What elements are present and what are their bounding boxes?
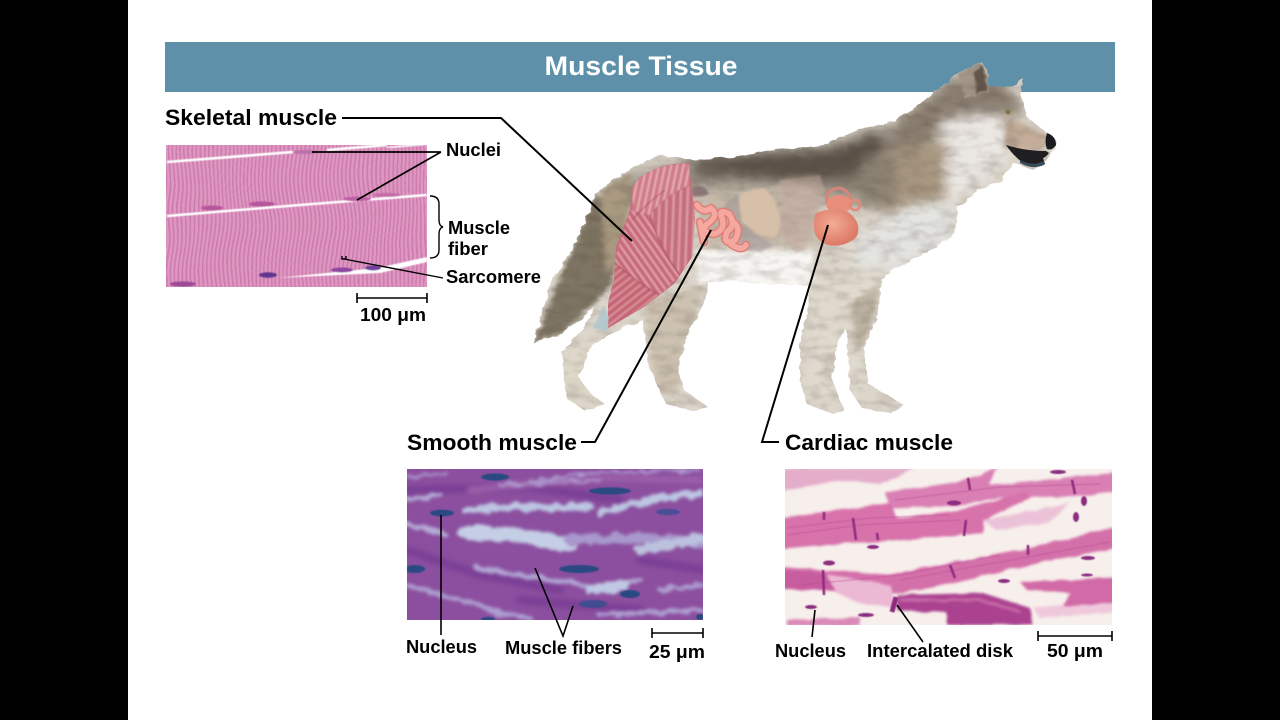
scale bar: 100 micrometres bbox=[357, 293, 427, 303]
label: muscle fibers: Muscle fibers bbox=[505, 638, 622, 658]
micrograph: smooth muscle bbox=[405, 469, 704, 621]
internal organs faint bbox=[692, 175, 825, 252]
heart bbox=[814, 188, 860, 246]
micrograph: skeletal muscle bbox=[166, 145, 427, 287]
tendon bbox=[593, 305, 609, 331]
wolf body with fur bbox=[525, 55, 1065, 420]
intestines bbox=[697, 205, 746, 248]
label: fiber: fiber bbox=[448, 239, 488, 259]
scale bar: 50 micrometres bbox=[1038, 631, 1112, 641]
micrograph: cardiac muscle bbox=[780, 467, 1115, 626]
callout line: cardiac muscle bbox=[762, 225, 828, 442]
smooth muscle labels and pointers bbox=[406, 515, 705, 662]
callout line: smooth muscle bbox=[581, 230, 711, 442]
heading: smooth muscle: Smooth muscle bbox=[407, 430, 577, 455]
heading: skeletal muscle: Skeletal muscle bbox=[165, 105, 337, 130]
wolf illustration bbox=[525, 55, 1065, 420]
scale label: 100 micrometres: 100 μm bbox=[360, 305, 426, 325]
scale label: 50 micrometres: 50 μm bbox=[1047, 641, 1103, 661]
label: nucleus: Nucleus bbox=[775, 641, 846, 661]
callout line: skeletal muscle bbox=[342, 118, 632, 241]
heading: cardiac muscle: Cardiac muscle bbox=[785, 430, 953, 455]
label: muscle fiber: Muscle bbox=[448, 218, 510, 238]
wolf mouth and nose bbox=[1006, 110, 1056, 167]
sarcomere pointer bbox=[342, 256, 443, 278]
label: intercalated disk: Intercalated disk bbox=[867, 641, 1014, 661]
scale label: 25 micrometres: 25 μm bbox=[649, 642, 705, 662]
title: Muscle Tissue bbox=[544, 51, 738, 81]
cardiac muscle labels and pointers bbox=[775, 605, 1112, 661]
brace: muscle fiber bbox=[430, 196, 443, 258]
title banner bbox=[165, 42, 1115, 92]
pointers: muscle fibers bbox=[535, 568, 573, 636]
label: nuclei: Nuclei bbox=[446, 140, 501, 160]
white slide bbox=[128, 0, 1152, 720]
label: nucleus: Nucleus bbox=[406, 637, 477, 657]
skeletal labels and pointers bbox=[312, 140, 541, 325]
pointer: intercalated disk bbox=[897, 605, 923, 642]
skeletal muscle on thigh bbox=[593, 160, 700, 335]
scale bar: 25 micrometres bbox=[652, 628, 703, 638]
label: sarcomere: Sarcomere bbox=[446, 267, 541, 287]
